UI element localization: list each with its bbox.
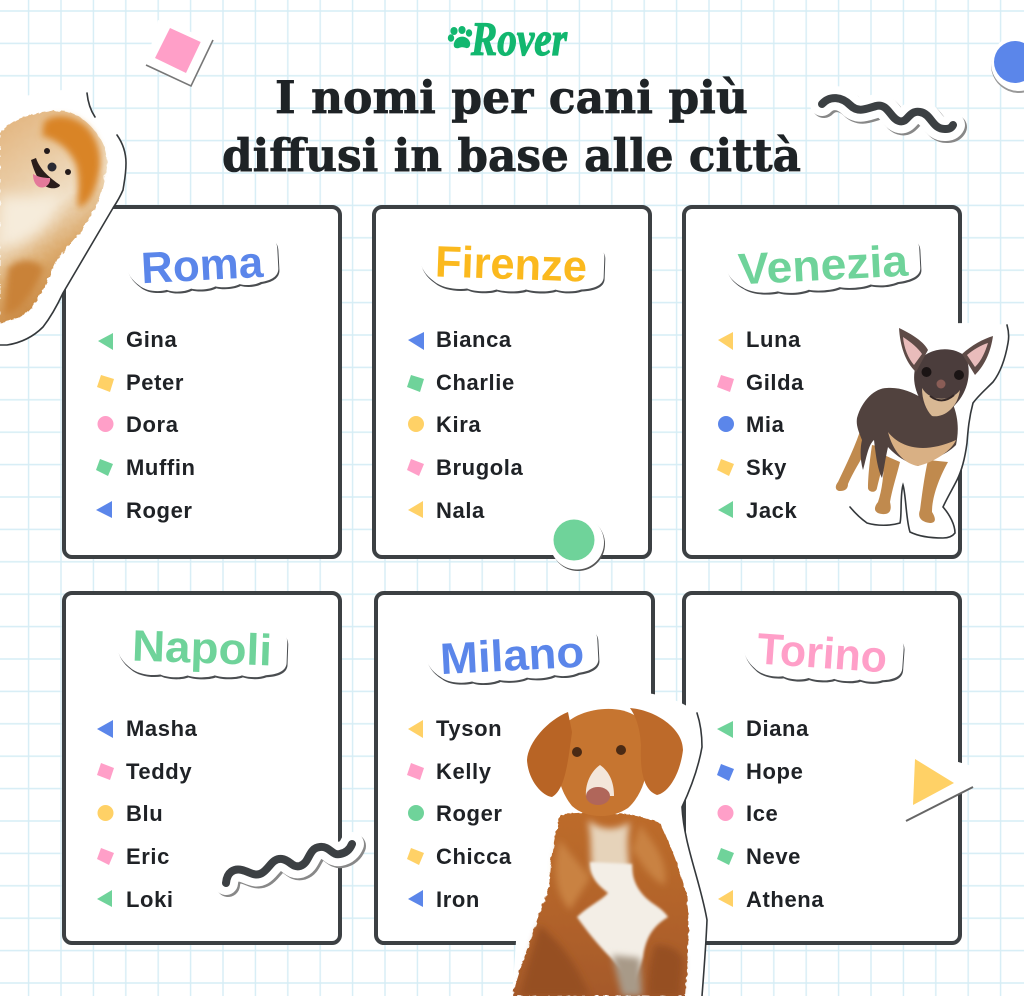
fur xyxy=(0,111,107,323)
panel: Roma xyxy=(64,207,340,557)
list: Napoli names: Teddy xyxy=(126,759,192,784)
panel: Torino xyxy=(684,593,973,943)
list: Roma names: Gina xyxy=(126,327,177,352)
panel: Venezia xyxy=(684,207,960,557)
list: Torino names xyxy=(717,716,824,912)
list: Milano names: Iron xyxy=(436,887,480,912)
list: Milano names: Kelly xyxy=(436,759,492,784)
sticker backing xyxy=(508,691,707,996)
list: Torino names: Athena xyxy=(746,887,824,912)
icon: paw xyxy=(448,26,472,48)
title: diffusi in base alle città xyxy=(222,129,801,182)
heading sticker: Napoli xyxy=(116,621,289,683)
dog head xyxy=(557,709,648,816)
photo: chihuahua dog xyxy=(817,323,1009,538)
panel: Firenze xyxy=(374,207,650,571)
list: Roma names: Muffin xyxy=(126,455,196,480)
list: Firenze names: Bianca xyxy=(436,327,512,352)
title: I nomi per cani più xyxy=(275,71,748,124)
decoration: blue circle sticker xyxy=(991,35,1024,93)
dog body xyxy=(857,388,958,478)
list: Venezia names: Gilda xyxy=(746,370,804,395)
logo: Rover: Rover xyxy=(470,13,568,66)
logo: Rover xyxy=(448,13,568,66)
list: Venezia names: Sky xyxy=(746,455,787,480)
heading sticker: Roma: Roma xyxy=(140,238,265,293)
title xyxy=(222,71,801,182)
list: Firenze names: Brugola xyxy=(436,455,523,480)
list: Torino names: Diana xyxy=(746,716,809,741)
list: Napoli names: Eric xyxy=(126,844,170,869)
list: Firenze names: Charlie xyxy=(436,370,515,395)
heading sticker: Napoli: Napoli xyxy=(131,622,273,675)
list: Milano names: Tyson xyxy=(436,716,502,741)
decoration: squiggle xyxy=(226,844,354,885)
decoration: pink square sticker xyxy=(146,20,213,86)
list: Milano names: Roger xyxy=(436,801,503,826)
list: Milano names xyxy=(407,716,512,912)
heading sticker: Torino: Torino xyxy=(756,624,889,682)
sticker backing xyxy=(817,323,1009,538)
decoration: yellow triangle sticker xyxy=(900,745,973,821)
dog muzzle xyxy=(586,765,614,796)
list: Napoli names xyxy=(97,716,198,912)
list: Roma names: Roger xyxy=(126,498,193,523)
heading sticker: Milano: Milano xyxy=(439,628,585,684)
list: Torino names: Hope xyxy=(746,759,803,784)
list: Torino names: Neve xyxy=(746,844,801,869)
list: Firenze names xyxy=(407,327,523,523)
list: Napoli names: Loki xyxy=(126,887,174,912)
photo: pomeranian dog xyxy=(0,90,126,345)
list: Milano names: Chicca xyxy=(436,844,512,869)
list: Roma names: Dora xyxy=(126,412,179,437)
sticker backing xyxy=(0,90,126,345)
photo: tolling retriever dog xyxy=(508,691,707,996)
dog legs xyxy=(836,425,948,523)
panel: Milano xyxy=(376,593,653,943)
dog body xyxy=(513,813,688,996)
dog lower chest xyxy=(612,955,642,996)
list: Venezia names: Luna xyxy=(746,327,801,352)
list: Venezia names xyxy=(717,327,804,523)
list: Roma names: Peter xyxy=(126,370,184,395)
decoration: green circle sticker xyxy=(550,516,605,571)
list: Firenze names: Kira xyxy=(436,412,481,437)
list: Torino names: Ice xyxy=(746,801,778,826)
list: Napoli names: Masha xyxy=(126,716,198,741)
dog white chest xyxy=(577,862,668,984)
decoration: squiggle top right xyxy=(822,98,955,131)
list: Napoli names: Blu xyxy=(126,801,163,826)
dog ears xyxy=(527,712,572,797)
heading sticker: Venezia: Venezia xyxy=(737,237,910,294)
list: Venezia names: Mia xyxy=(746,412,785,437)
list: Venezia names: Jack xyxy=(746,498,798,523)
heading sticker: Firenze: Firenze xyxy=(434,237,588,292)
panel: Napoli xyxy=(64,593,354,943)
dog neck fur xyxy=(588,820,630,872)
dog head xyxy=(914,349,969,414)
dog face xyxy=(31,158,60,188)
list: Roma names xyxy=(96,327,196,523)
list: Firenze names: Nala xyxy=(436,498,485,523)
